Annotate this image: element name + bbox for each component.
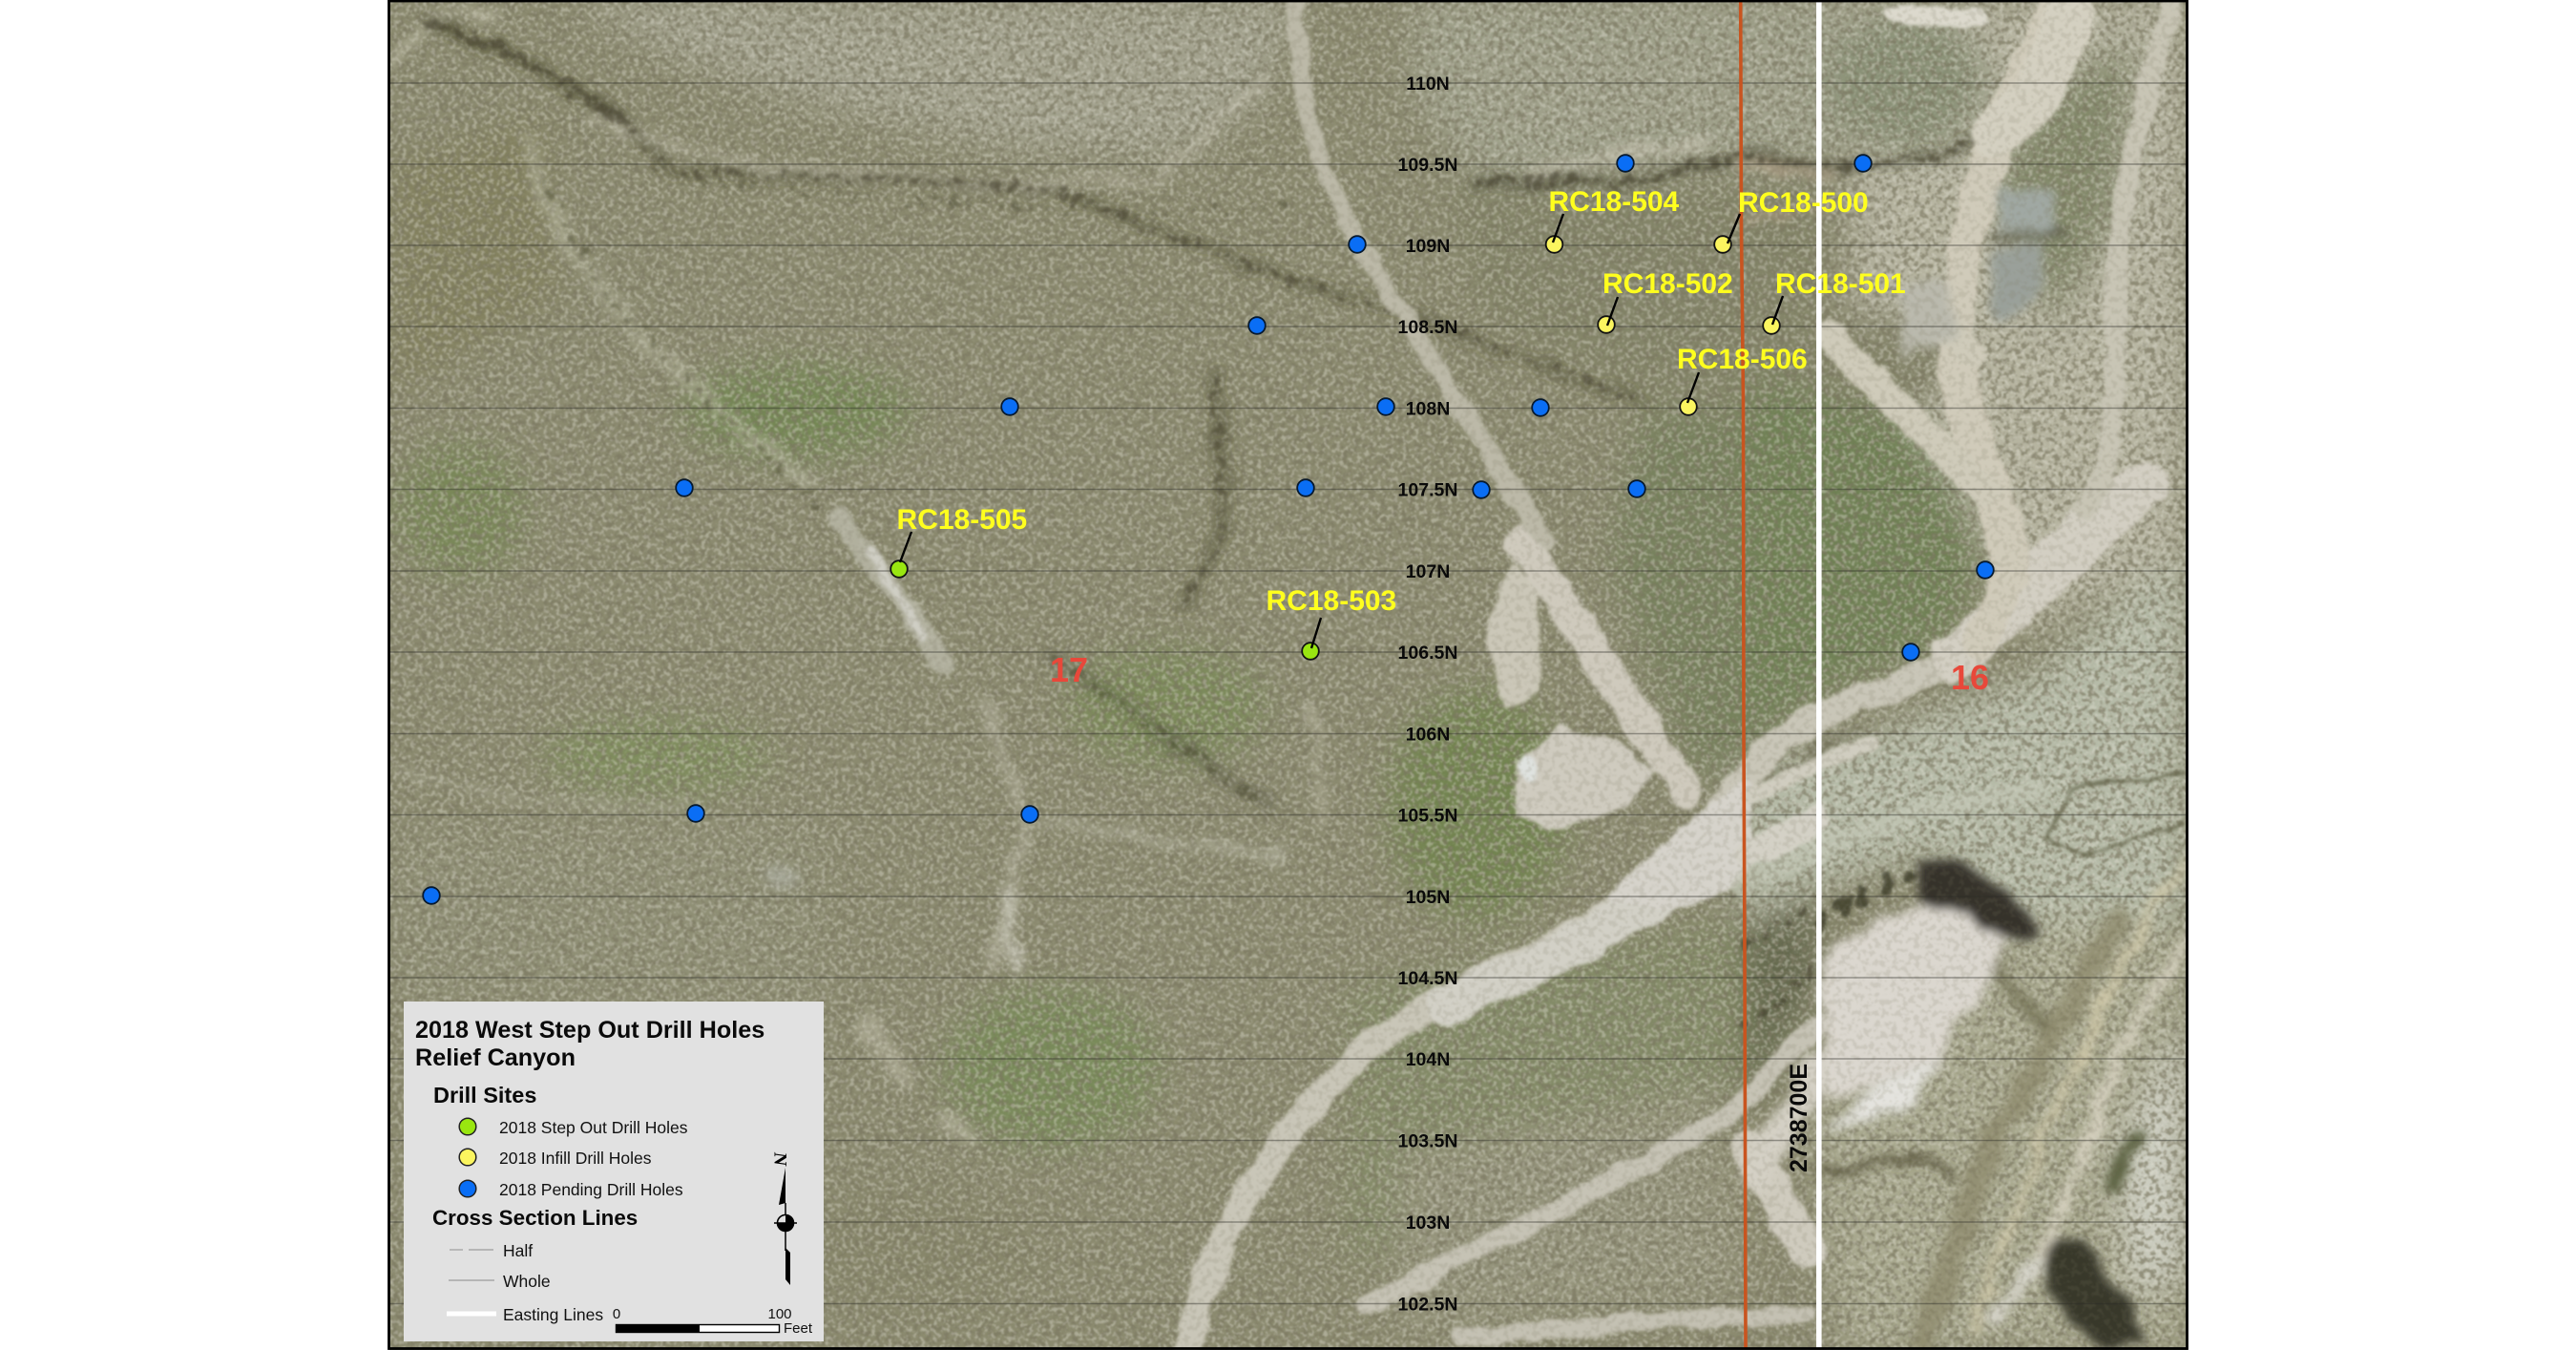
- main road: [1186, 633, 1996, 1350]
- drill hole RC18-506: RC18-506: [1677, 344, 1808, 375]
- northing labels: 104.5N: [1398, 968, 1457, 989]
- legend item: pending: 2018 Pending Drill Holes: [499, 1180, 683, 1199]
- drill hole RC18-501: [1763, 268, 1906, 334]
- pale embankment: [1749, 740, 1873, 797]
- northing labels: 107.5N: [1398, 479, 1457, 500]
- northing labels: 104N: [1406, 1049, 1450, 1070]
- lower roads: [1367, 1027, 1815, 1306]
- easting line: [1816, 2, 1822, 1348]
- drill hole RC18-505: [890, 504, 1027, 578]
- scale bar: Feet: [784, 1320, 813, 1337]
- drill hole RC18-503: RC18-503: [1266, 585, 1396, 617]
- northing labels: 103.5N: [1398, 1130, 1457, 1151]
- northing labels: 102.5N: [1398, 1295, 1457, 1316]
- heading: drill sites: Drill Sites: [433, 1083, 536, 1107]
- drill hole RC18-502: RC18-502: [1602, 268, 1733, 300]
- northing labels: 109.5N: [1398, 155, 1457, 176]
- mine benches: [1922, 920, 2119, 1347]
- section number 16: 16: [1951, 658, 1989, 697]
- heading: cross section lines: Cross Section Lines: [432, 1206, 638, 1230]
- pending drill hole markers: [423, 155, 1994, 904]
- drill hole RC18-504: [1546, 186, 1680, 253]
- legend item: easting lines: Easting Lines: [503, 1305, 603, 1324]
- northing labels: 105N: [1406, 887, 1450, 908]
- legend item: step out: 2018 Step Out Drill Holes: [499, 1118, 688, 1137]
- north arrow: N: [770, 1151, 789, 1168]
- northing labels: 110N: [1406, 74, 1450, 95]
- drill hole RC18-505: RC18-505: [897, 504, 1027, 536]
- drill hole RC18-504: RC18-504: [1548, 186, 1680, 218]
- northing labels: 108.5N: [1398, 317, 1457, 338]
- northing labels: 103N: [1406, 1213, 1450, 1234]
- drill hole RC18-500: [1714, 187, 1869, 253]
- cross section grid lines: [389, 83, 2187, 1304]
- map frame: [389, 1, 2188, 1348]
- light ground speckle: [389, 0, 2188, 1350]
- northing labels: 108N: [1406, 399, 1450, 420]
- drill hole RC18-502: [1598, 268, 1733, 333]
- pad: [1492, 567, 1536, 707]
- northing labels: 109N: [1406, 236, 1450, 257]
- legend title: 2018 West Step Out Drill Holes: [415, 1017, 764, 1044]
- legend item: half: Half: [503, 1241, 533, 1260]
- vegetation speckle: [389, 0, 2188, 1350]
- north road: [1297, 0, 1544, 542]
- road speckle overlay: [389, 0, 2188, 1350]
- scale bar: 0: [613, 1306, 620, 1322]
- rock piles: [2001, 184, 2057, 230]
- scale bar: [613, 1306, 813, 1337]
- legend item: whole: Whole: [503, 1272, 551, 1291]
- white waste dump: [1820, 900, 2011, 1098]
- northing labels: 106N: [1406, 724, 1450, 745]
- junction fill: [1618, 789, 1745, 900]
- legend item: whole: [449, 1272, 551, 1291]
- scale bar: 100: [767, 1306, 792, 1322]
- section boundary orange line: [1741, 0, 1746, 1348]
- map figure: [387, 0, 2189, 1350]
- drill hole RC18-503: [1266, 585, 1396, 660]
- dark slope: [1922, 864, 2041, 934]
- left wash: [838, 517, 945, 665]
- legend item: easting lines: [447, 1305, 603, 1324]
- dark pit: [2045, 1233, 2148, 1347]
- legend item: half: [450, 1241, 533, 1260]
- legend subtitle: Relief Canyon: [415, 1044, 576, 1071]
- easting label: 2738700E: [1786, 1064, 1812, 1172]
- northing labels: 105.5N: [1398, 806, 1457, 827]
- berm outline: [2045, 772, 2187, 854]
- north arrow: [770, 1151, 797, 1285]
- northing labels: 106.5N: [1398, 643, 1457, 664]
- satellite imagery: [389, 0, 2188, 1350]
- drill hole RC18-500: RC18-500: [1738, 187, 1869, 219]
- drill hole RC18-506: [1677, 344, 1808, 415]
- shrub lines: [428, 20, 616, 118]
- northing labels: 107N: [1406, 561, 1450, 582]
- soft shrub bands: [599, 98, 1643, 403]
- legend item: infill: 2018 Infill Drill Holes: [499, 1149, 652, 1168]
- section number 17: 17: [1050, 650, 1088, 689]
- legend panel: [404, 1002, 824, 1341]
- upper right roads: [2086, 0, 2172, 510]
- drill hole RC18-501: RC18-501: [1775, 268, 1906, 300]
- northing labels: [1398, 74, 1457, 1316]
